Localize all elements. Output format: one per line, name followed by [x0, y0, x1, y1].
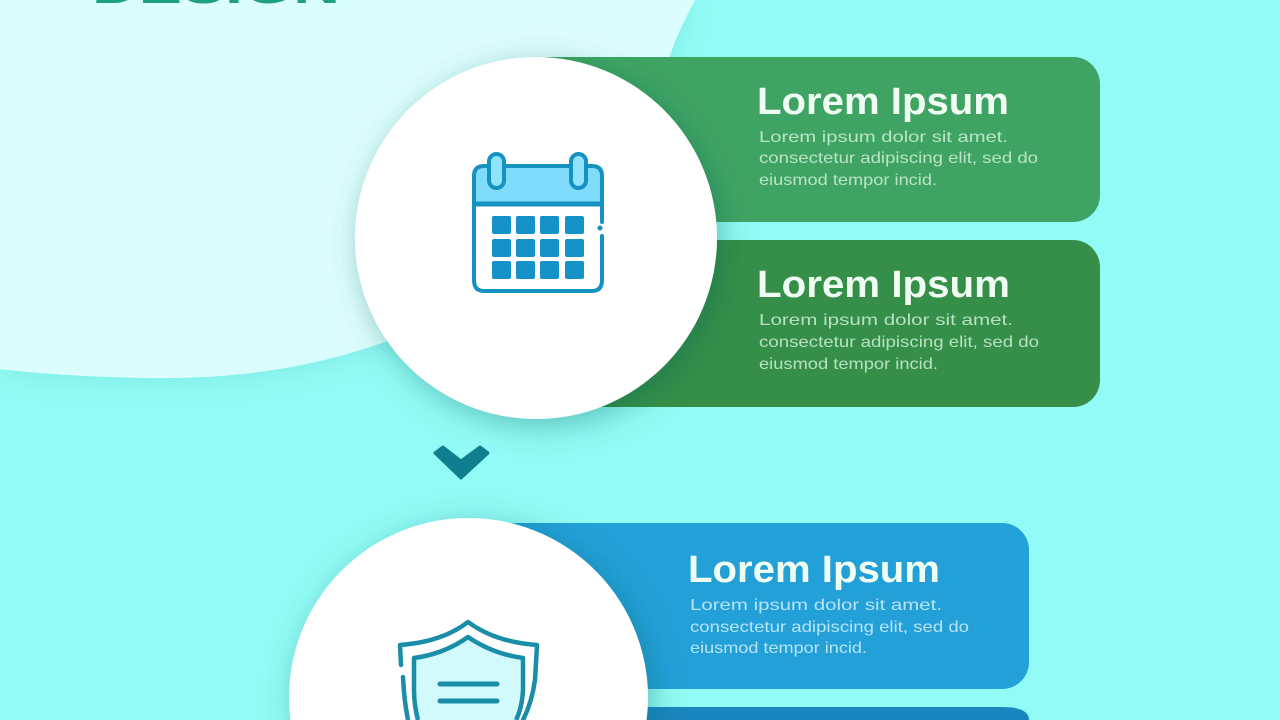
panel: step 1	[355, 57, 1100, 419]
text block: card 2	[759, 312, 1039, 373]
circle: step 2	[289, 518, 648, 720]
text block: card 2: eiusmod tempor incid.	[759, 356, 938, 373]
text block: card 1: Lorem ipsum dolor sit amet.	[759, 129, 1008, 146]
heading: card 2: Lorem Ipsum	[757, 264, 1010, 306]
text block: card 3: consectetur adipiscing elit, sed do	[690, 619, 969, 636]
text block: card 2: Lorem ipsum dolor sit amet.	[759, 312, 1013, 329]
bar: first blue card	[480, 523, 1029, 689]
bar: second green card	[520, 240, 1100, 407]
text block: card 2: consectetur adipiscing elit, sed do	[759, 334, 1039, 351]
panel: top-left header blob	[0, 0, 695, 378]
text block: card 1	[759, 129, 1038, 189]
heading: card 3: Lorem Ipsum	[688, 549, 940, 591]
bar: second blue card	[560, 707, 1029, 720]
arrow: chevron down	[435, 447, 488, 478]
text block: card 3: eiusmod tempor incid.	[690, 640, 867, 657]
text block: card 1: consectetur adipiscing elit, sed do	[759, 150, 1038, 167]
bar: first green card	[520, 57, 1100, 222]
circle: step 1	[355, 57, 717, 419]
text block: card 3	[690, 597, 969, 657]
icon: shield	[400, 622, 537, 720]
text block: card 3: Lorem ipsum dolor sit amet.	[690, 597, 942, 614]
icon: calendar	[474, 154, 602, 291]
heading: card 1: Lorem Ipsum	[757, 81, 1009, 123]
text block: card 1: eiusmod tempor incid.	[759, 172, 937, 189]
panel: step 2	[289, 518, 1029, 720]
